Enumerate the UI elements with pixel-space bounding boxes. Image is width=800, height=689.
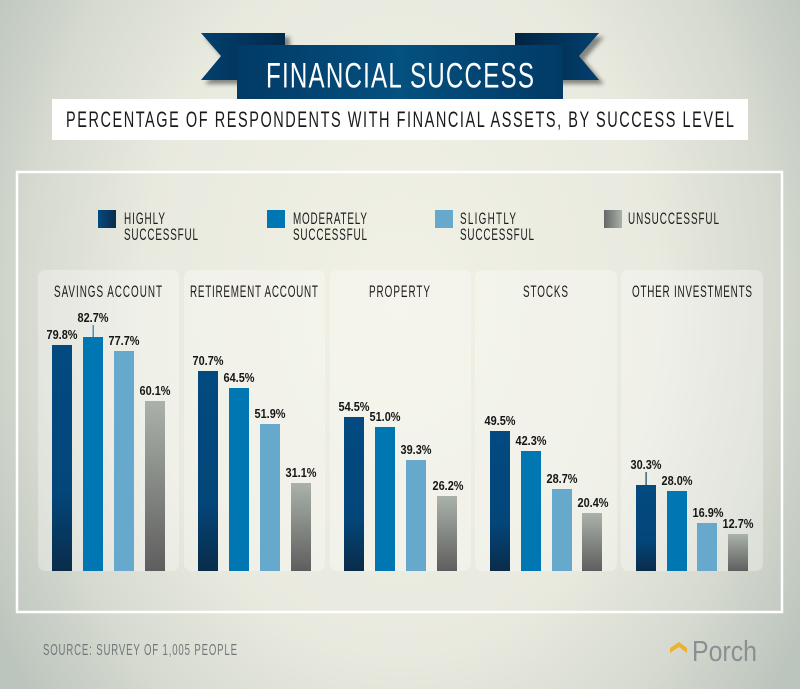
bar chart: other investments	[630, 458, 754, 571]
legend: unsuccessful: UNSUCCESSFUL	[628, 209, 719, 228]
legend: slightly successful: SUCCESSFUL	[460, 225, 534, 244]
bar chart: retirement account: 51.9%	[254, 407, 286, 421]
panel: savings account	[38, 270, 179, 571]
bar chart: property: 26.2%	[432, 479, 464, 493]
bar chart: retirement account: 64.5%	[224, 371, 254, 385]
legend: moderately successful: SUCCESSFUL	[293, 225, 367, 244]
source note: SOURCE: SURVEY OF 1,005 PEOPLE	[43, 641, 237, 659]
bar chart: stocks: 28.7%	[546, 472, 578, 486]
title banner	[201, 33, 604, 99]
bar chart: savings account: 79.8%	[46, 328, 78, 342]
bar chart: property: 51.0%	[370, 410, 400, 424]
heading: retirement account: RETIREMENT ACCOUNT	[190, 282, 318, 301]
bar chart: stocks: 49.5%	[484, 414, 516, 428]
chart frame	[17, 172, 782, 612]
bar chart: savings account: 60.1%	[140, 384, 170, 398]
title text: FINANCIAL SUCCESS	[266, 57, 534, 96]
bar chart: property: 39.3%	[400, 443, 432, 457]
heading: savings account: SAVINGS ACCOUNT	[54, 282, 162, 301]
bar chart: other investments: 16.9%	[692, 506, 724, 520]
legend: slightly successful: SLIGHTLY	[460, 209, 516, 228]
subtitle band	[52, 99, 748, 140]
bar chart: stocks	[484, 414, 608, 571]
bar chart: other investments: 12.7%	[722, 517, 754, 531]
subtitle band: PERCENTAGE OF RESPONDENTS WITH FINANCIAL ASSETS, BY SUCCESS LEVEL	[66, 107, 734, 132]
panel: other investments	[621, 270, 763, 571]
legend: moderately successful	[267, 209, 367, 244]
legend: highly successful: HIGHLY	[124, 209, 165, 228]
bar chart: stocks: 20.4%	[578, 496, 608, 510]
bar chart: savings account: 82.7%	[78, 311, 108, 325]
bar chart: other investments: 28.0%	[662, 474, 692, 488]
icon: chevron	[670, 642, 687, 653]
heading: other investments: OTHER INVESTMENTS	[632, 282, 752, 301]
panel: property	[330, 270, 471, 571]
heading: stocks: STOCKS	[523, 282, 568, 301]
bar chart: retirement account: 31.1%	[286, 466, 316, 480]
bar chart: stocks: 42.3%	[516, 434, 546, 448]
legend	[98, 209, 719, 244]
legend: moderately successful: MODERATELY	[293, 209, 367, 228]
panel: retirement account	[184, 270, 325, 571]
bar chart: retirement account: 70.7%	[192, 354, 224, 368]
bar chart: savings account: 77.7%	[108, 334, 140, 348]
legend: highly successful: SUCCESSFUL	[124, 225, 198, 244]
bar chart: property	[338, 400, 464, 571]
heading: property: PROPERTY	[369, 282, 430, 301]
Porch logo	[670, 636, 757, 668]
legend: highly successful	[98, 209, 198, 244]
bar chart: retirement account	[192, 354, 316, 571]
bar chart: property: 54.5%	[338, 400, 370, 414]
panel: stocks	[475, 270, 617, 571]
legend: slightly successful	[435, 209, 534, 244]
bar chart: other investments: 30.3%	[630, 458, 662, 472]
Porch logo: Porch	[692, 636, 757, 668]
bar chart: savings account	[46, 311, 170, 571]
